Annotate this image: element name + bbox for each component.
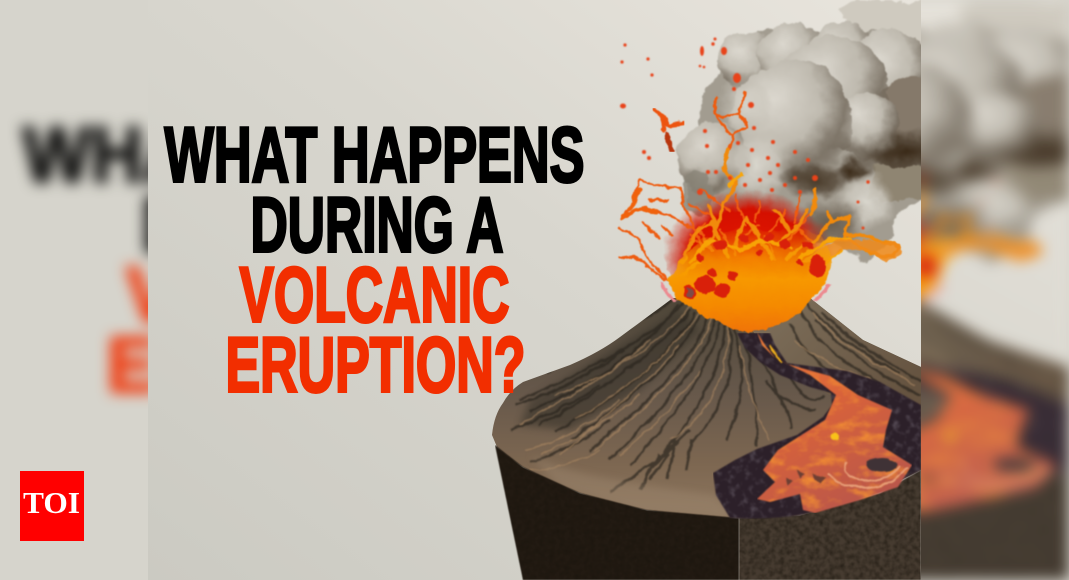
- rock cylinder: shaded side: [495, 445, 739, 580]
- mountain slope: [492, 298, 921, 519]
- lava splash: upper left blob: [654, 110, 683, 150]
- background: blurred left side panel: VOLCANIC: [127, 251, 500, 338]
- volcano illustration: [492, 0, 1069, 580]
- title line 3: VOLCANIC: [240, 250, 510, 338]
- light ridge streaks: [520, 305, 915, 470]
- background: blurred left side panel: ERUPTION?: [107, 321, 522, 408]
- dark shaded flank: [520, 310, 700, 430]
- ash cloud: [678, 0, 952, 266]
- lava flow: dark crust: [713, 333, 921, 519]
- background: blurred left side panel: [11, 114, 148, 405]
- background: blurred right side panel: [921, 2, 1069, 580]
- background: blurred left side panel: WHAT HAPPENS: [23, 111, 604, 198]
- main panel background: [148, 0, 921, 580]
- TOI logo: [20, 471, 84, 541]
- fireball at crater: [661, 226, 832, 332]
- title line 2: DURING A: [250, 180, 504, 268]
- background: blurred left side panel: DURING A: [142, 181, 492, 268]
- erupting lava: tendrils: [620, 92, 898, 280]
- title: [164, 110, 584, 408]
- dark ridge streaks: [510, 300, 921, 490]
- erupting lava: fine red vein layer: [690, 190, 812, 260]
- rock cylinder: lit side: [739, 470, 921, 580]
- lava droplets: [620, 38, 870, 230]
- title line 1: WHAT HAPPENS: [164, 110, 584, 198]
- lava tendril: right plume: [800, 238, 902, 262]
- erupting lava: red core: [662, 176, 834, 312]
- lava flow: molten stream: [757, 332, 912, 513]
- TOI logo: TOI: [23, 485, 80, 520]
- title line 4: ERUPTION?: [226, 320, 526, 408]
- pale lower apron: [535, 458, 718, 510]
